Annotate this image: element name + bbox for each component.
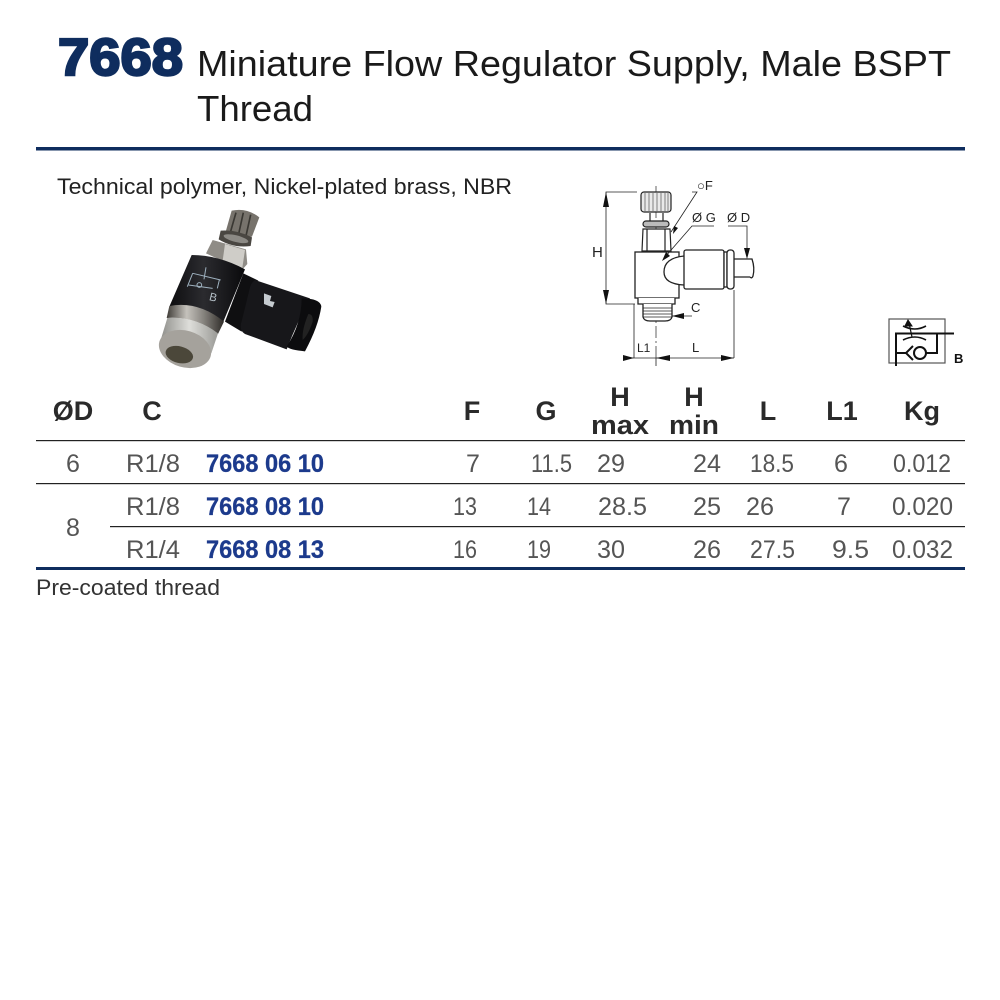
header rule <box>36 147 965 150</box>
table header: H <box>684 382 704 412</box>
row 7668 08 10: 0.020 <box>892 493 953 521</box>
row 7668 06 10: 11.5 <box>531 450 572 478</box>
product photo: B <box>208 291 218 305</box>
table header: Kg <box>904 396 940 426</box>
table header <box>53 382 940 440</box>
title <box>58 29 951 129</box>
nickel collar <box>167 305 224 334</box>
dimension labels <box>592 178 750 355</box>
table header: C <box>142 396 162 426</box>
logo mark <box>264 293 275 307</box>
row 7668 06 10: 7668 06 10 <box>206 450 324 478</box>
dimension arrowheads <box>603 192 750 361</box>
row 7668 06 10: 24 <box>693 450 721 478</box>
adjustment knob <box>641 192 671 251</box>
dimension lines <box>606 192 747 366</box>
dimension labels: Ø G <box>692 210 716 225</box>
dimension labels: L <box>692 340 699 355</box>
dimension labels: L1 <box>637 341 651 355</box>
materials text: Technical polymer, Nickel-plated brass, NBR <box>57 174 512 199</box>
thread <box>161 318 218 353</box>
row 7668 08 10 <box>126 493 953 521</box>
collar ring <box>219 230 252 246</box>
row 7668 08 13: 16 <box>453 536 477 564</box>
product photo <box>154 210 321 374</box>
table header: H <box>610 382 630 412</box>
table rules <box>36 440 965 570</box>
row 7668 06 10: 18.5 <box>750 450 794 478</box>
centre line <box>655 186 657 360</box>
row 7668 06 10: 6 <box>66 450 80 478</box>
hex nut <box>206 240 247 270</box>
row 7668 08 10: 7668 08 10 <box>206 493 324 521</box>
body symbol <box>187 267 221 288</box>
dimension labels: ○F <box>697 178 713 193</box>
product number: 7668 <box>58 29 183 87</box>
table header: F <box>464 396 480 426</box>
product name second line: Thread <box>197 88 313 129</box>
product name: Miniature Flow Regulator Supply, Male BSPT <box>197 43 951 84</box>
black side arm <box>241 280 310 349</box>
row 7668 08 13: 30 <box>597 536 625 564</box>
row 7668 08 10: R1/8 <box>126 493 180 521</box>
merged cell 8: 8 <box>66 514 80 542</box>
row 7668 08 13: R1/4 <box>126 536 180 564</box>
table header: L1 <box>826 396 858 426</box>
table header: max <box>591 410 649 440</box>
table header: G <box>535 396 557 426</box>
row 7668 08 13 <box>126 536 953 564</box>
arm flange <box>287 298 321 351</box>
black neck <box>225 273 258 332</box>
pneumatic symbol <box>889 319 963 366</box>
row 7668 06 10: 29 <box>597 450 625 478</box>
row 7668 08 13: 0.032 <box>892 536 953 564</box>
row 7668 08 10: 13 <box>453 493 477 521</box>
dimension labels: H <box>592 244 603 261</box>
row 7668 08 10: 26 <box>746 493 774 521</box>
table header: min <box>669 410 719 440</box>
row 7668 08 13: 19 <box>527 536 551 564</box>
row 7668 08 13: 27.5 <box>750 536 795 564</box>
row 7668 08 13: 9.5 <box>832 536 869 564</box>
row 7668 08 10: 28.5 <box>598 493 647 521</box>
row 7668 06 10 <box>66 450 951 478</box>
row 7668 06 10: 0.012 <box>893 450 951 478</box>
row 7668 06 10: R1/8 <box>126 450 180 478</box>
row 7668 08 13: 26 <box>693 536 721 564</box>
black T body <box>169 255 245 322</box>
knurled adjuster <box>226 210 259 237</box>
footnote: Pre-coated thread <box>36 575 220 600</box>
data table <box>36 382 965 570</box>
nickel end <box>154 324 216 374</box>
row 7668 08 10: 25 <box>693 493 721 521</box>
main body <box>635 250 754 321</box>
row 7668 06 10: 7 <box>466 450 480 478</box>
table header: L <box>760 396 776 426</box>
dimension labels: C <box>691 300 700 315</box>
row 7668 08 13: 7668 08 13 <box>206 536 324 564</box>
dimension labels: Ø D <box>727 210 750 225</box>
row 7668 08 10: 14 <box>527 493 551 521</box>
row 7668 08 10: 7 <box>837 493 851 521</box>
technical drawing <box>592 178 754 366</box>
table header: ØD <box>53 396 93 426</box>
pneumatic symbol: B <box>954 351 963 366</box>
row 7668 06 10: 6 <box>834 450 848 478</box>
